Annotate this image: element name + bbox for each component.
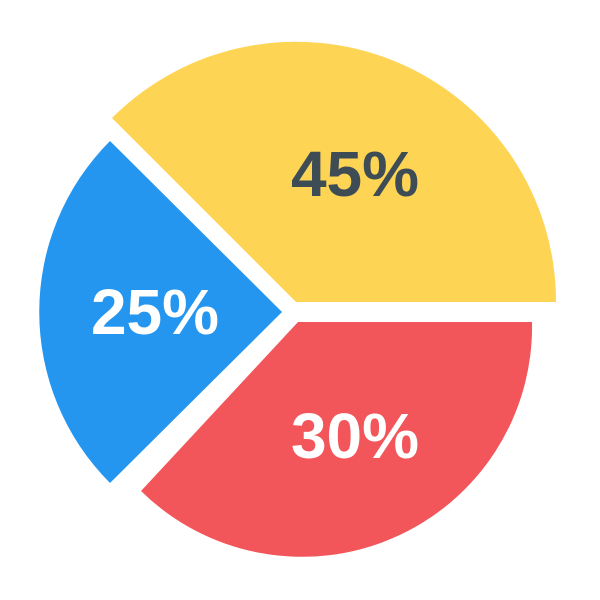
slice: blue 25% [39, 141, 282, 483]
slice: red 30% [141, 322, 532, 557]
label: 30%: 30% [291, 400, 419, 472]
label: 25%: 25% [91, 276, 219, 348]
label: 45%: 45% [291, 138, 419, 210]
